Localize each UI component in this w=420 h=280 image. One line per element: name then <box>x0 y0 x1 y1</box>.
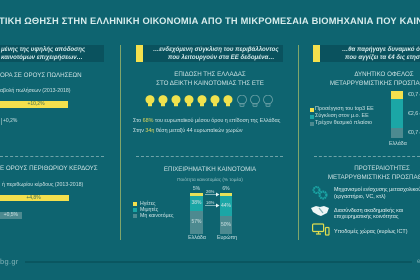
accent <box>313 44 320 62</box>
innovation heading <box>156 71 264 87</box>
sales bar yellow <box>0 101 68 108</box>
footer url: bg.gr <box>0 257 19 266</box>
stacked bar: Europe: 50% <box>221 222 231 228</box>
panel heading: left: μένης της υψηλής απόδοσης <box>1 46 85 53</box>
stacked bar: Greece: 5% <box>193 186 200 192</box>
sales bar grey <box>1 118 2 124</box>
panel heading: right <box>313 44 420 62</box>
stacked bar: Greece <box>190 186 203 234</box>
panel heading: middle: …ενδεχόμενη σύγκλιση του περιβάλλοντος <box>153 46 279 53</box>
sales bar value: +0,2% <box>3 118 17 124</box>
legend: Μιμητές <box>140 207 158 213</box>
stacked bar: Europe <box>220 186 232 234</box>
panel: sales <box>0 72 82 125</box>
footer rule <box>25 261 412 263</box>
dashed divider <box>136 156 283 157</box>
label: Greece: Ελλάδα <box>389 141 407 147</box>
legend grey <box>310 122 314 126</box>
legend yellow <box>133 202 137 206</box>
chart subtitle: Ποιότητα καινοτομίας (% τομέα) <box>177 177 243 182</box>
legend grey <box>133 214 137 218</box>
legend: Μη καινοτόμες <box>140 213 173 219</box>
icon row: light bulbs <box>146 95 273 107</box>
icon: devices <box>312 223 330 236</box>
priorities heading <box>328 165 420 180</box>
business innovation heading: ΕΠΙΧΕΙΡΗΜΑΤΙΚΗ ΚΑΙΝΟΤΟΜΙΑ <box>164 166 256 173</box>
divider left <box>120 45 121 240</box>
icon: handshake <box>311 206 329 216</box>
stacked bar: benefit <box>391 91 420 138</box>
priority text 1 <box>334 186 420 200</box>
innovation heading: ΕΠΙΔΟΣΗ ΤΗΣ ΕΛΛΑΔΑΣ <box>174 71 246 78</box>
stacked bar: Greece: 38% <box>191 200 202 206</box>
dashed divider <box>314 156 420 157</box>
benefit legend: Προσέγγιση του top3 ΕΕ <box>315 106 374 112</box>
label: Europe: Ευρώπη <box>217 235 237 241</box>
priority text 2: Διασύνδεση ακαδημαϊκής και <box>334 208 403 214</box>
innovation text 2: Στην 34η θέση μεταξύ 44 ευρωπαϊκών χωρών <box>133 128 243 134</box>
arrow 2 <box>205 200 220 208</box>
margin bar grey <box>0 212 22 219</box>
benefit legend <box>310 106 374 126</box>
accent <box>136 44 143 62</box>
margin bar yellow: +4,8% <box>26 195 41 201</box>
panel heading: left: καινοτόμων επιχειρήσεων… <box>1 54 83 60</box>
arrow 2: 16% <box>206 200 215 205</box>
margin bar grey: +0,5% <box>4 212 18 218</box>
icon: gears <box>312 186 328 200</box>
sales heading: ΟΡΑ ΣΕ ΟΡΟΥΣ ΠΩΛΗΣΕΩΝ <box>0 72 82 79</box>
legend yellow <box>310 108 314 112</box>
legend: Ηγέτες <box>140 201 156 207</box>
stacked bar: Europe: 44% <box>221 202 231 208</box>
label: Greece: Ελλάδα <box>188 235 206 241</box>
innovation text 1: Στο 68% του ευρωπαϊκού μέσου όρου η επίδοση της Ελλάδας <box>133 118 280 124</box>
priorities heading: ΠΡΟΤΕΡΑΙΟΤΗΤΕΣ <box>354 165 410 172</box>
dashed divider <box>0 156 104 157</box>
margin subtitle: ή περιθωρίου κέρδους (2013-2018) <box>2 182 83 188</box>
arrow 1 <box>205 189 220 196</box>
sales bar yellow: +10,2% <box>27 101 45 107</box>
stacked bar: Europe: 6% <box>222 186 230 192</box>
priority text 1: (εργαστήριο, VC, κτλ) <box>334 194 386 200</box>
benefit heading <box>330 71 420 87</box>
panel heading: middle: που λειτουργούν στα ΕΕ δεδομένα… <box>168 54 274 60</box>
sales subtitle: αβολή πωλήσεων (2013-2018) <box>0 88 70 94</box>
legend teal <box>133 208 137 212</box>
panel heading: left <box>0 44 104 62</box>
benefit heading: ΔΥΝΗΤΙΚΟ ΟΦΕΛΟΣ <box>354 71 414 78</box>
stacked bar: Greece: 57% <box>191 218 202 224</box>
innovation heading: ΣΤΟ ΔΕΙΚΤΗ ΚΑΙΝΟΤΟΜΙΑΣ ΤΗΣ ΕΤΕ <box>156 80 264 87</box>
priority text 2 <box>334 208 403 220</box>
legend teal <box>310 114 314 118</box>
margin heading: Ε ΟΡΟΥΣ ΠΕΡΙΘΩΡΙΟΥ ΚΕΡΔΟΥΣ <box>0 165 98 172</box>
legend <box>133 200 174 219</box>
priority text 3: Υποδομές χώρας (κυρίως ICT) <box>334 228 408 234</box>
arrow 1: 26% <box>206 189 215 194</box>
priority text 2: επιχειρηματικής κοινότητας <box>334 214 398 220</box>
panel heading: middle <box>136 44 283 62</box>
benefit legend: Σύγκλιση στον μ.ο. ΕΕ <box>315 113 369 119</box>
title: ΤΙΚΗ ΩΘΗΣΗ ΣΤΗΝ ΕΛΛΗΝΙΚΗ ΟΙΚΟΝΟΜΙΑ ΑΠΟ ΤΗ ΜΙΚΡΟΜΕΣΑΙΑ ΒΙΟΜΗΧΑΝΙΑ ΠΟΥ ΚΑΙΝ <box>0 16 420 26</box>
panel: margin <box>0 165 98 219</box>
benefit legend: Τρέχον θεσμικό πλαίσιο <box>315 120 372 126</box>
divider right <box>298 45 299 240</box>
margin bar yellow <box>0 195 69 201</box>
